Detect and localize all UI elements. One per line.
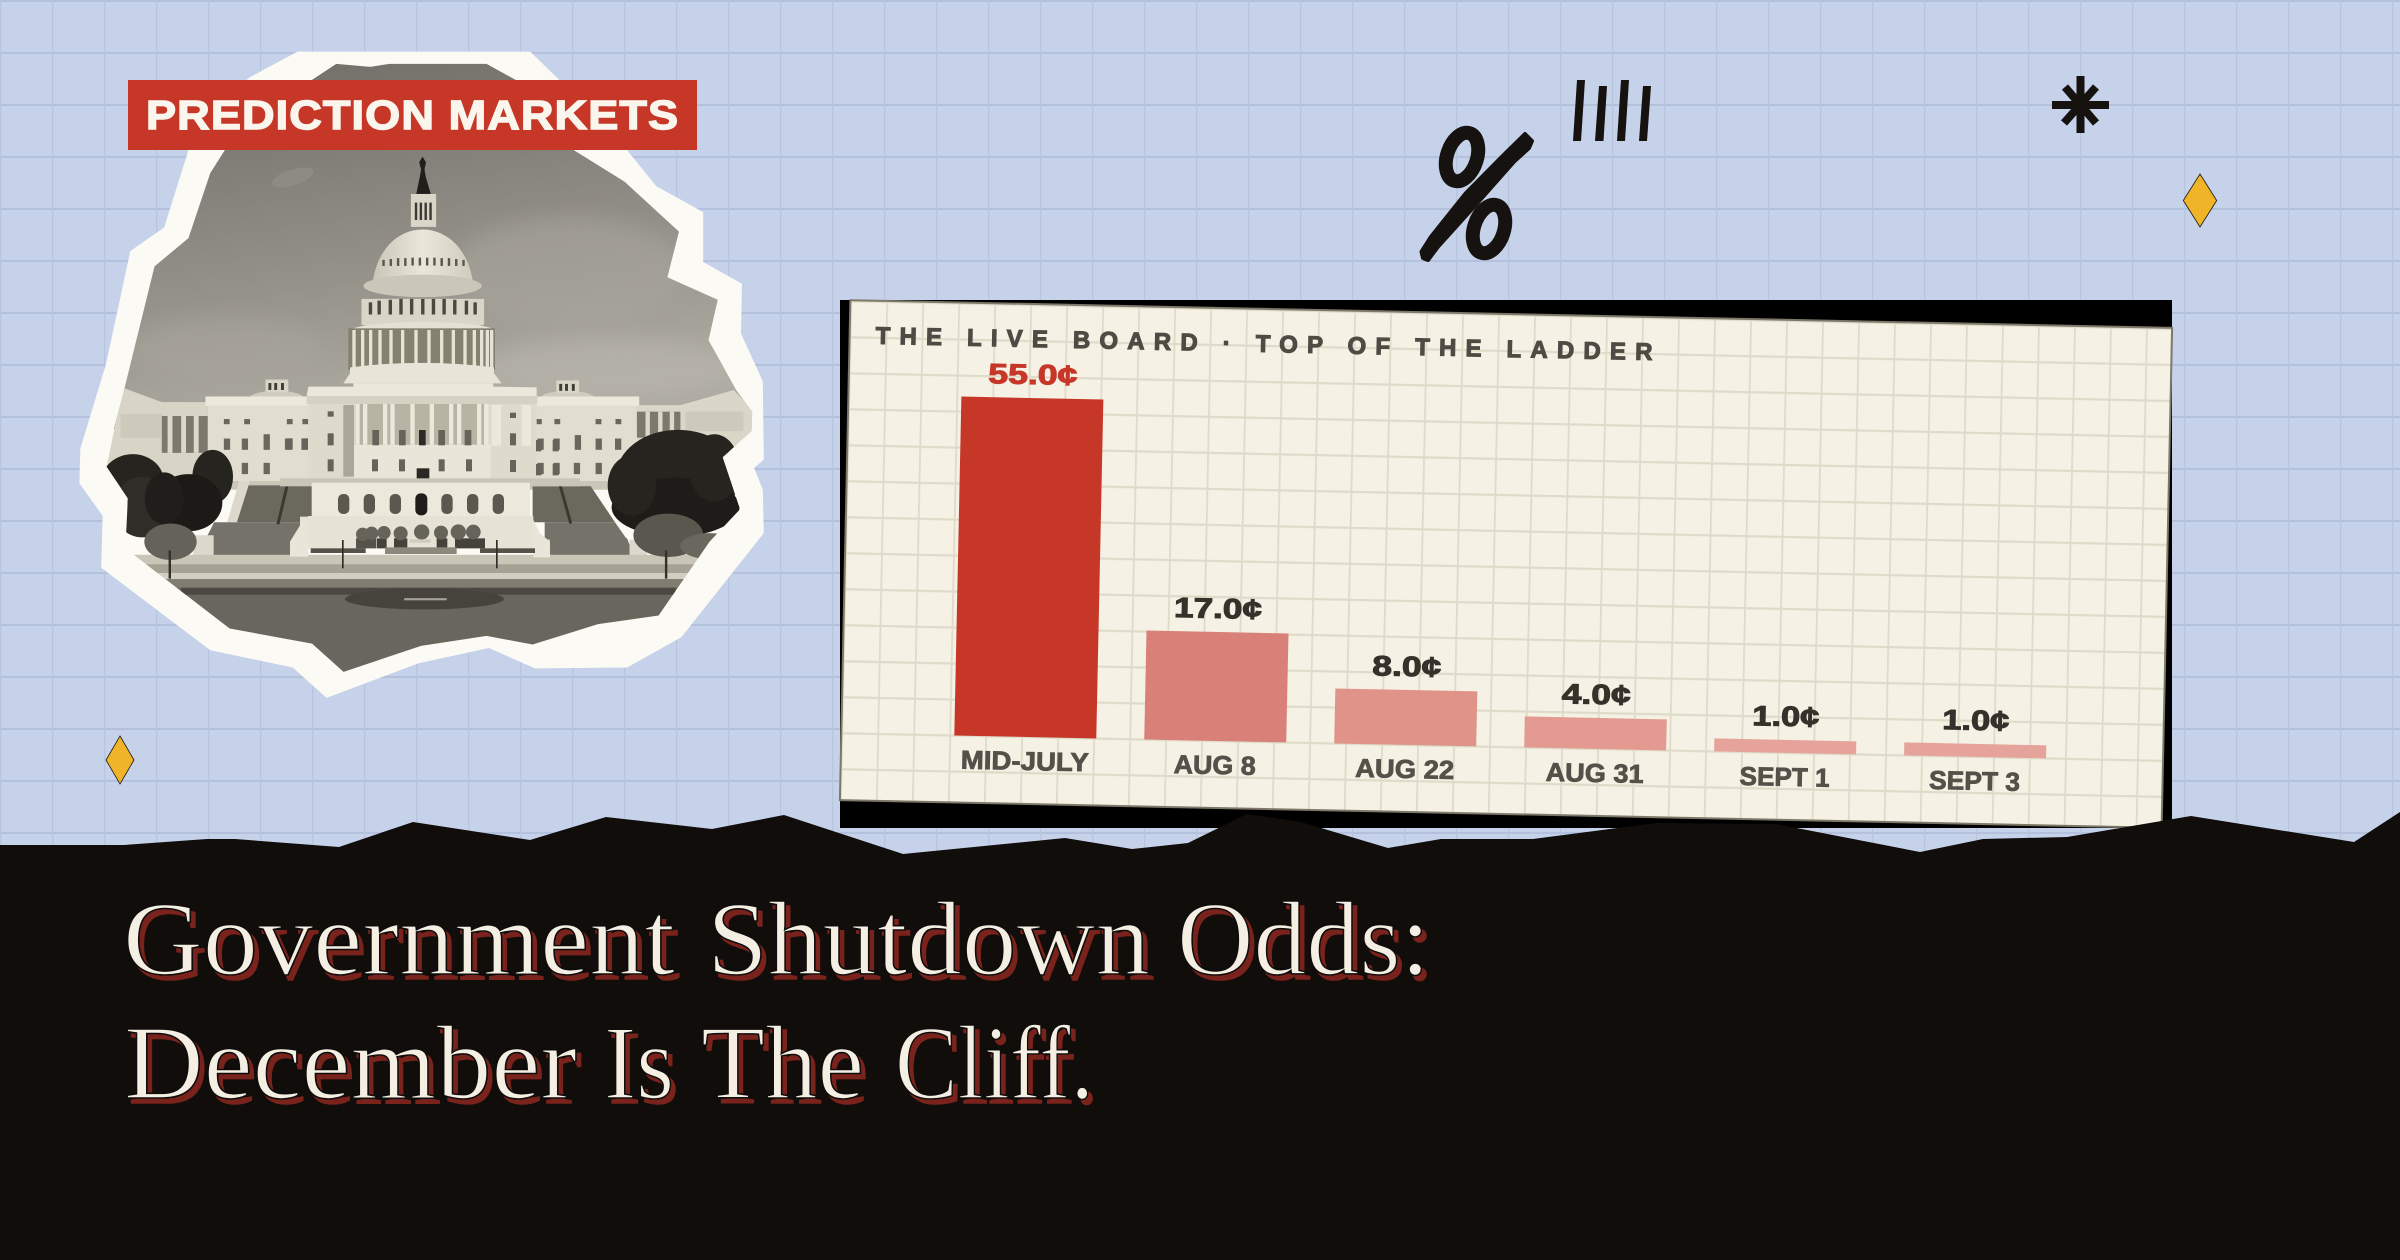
chart panel: live board xyxy=(840,300,2172,828)
bar: Aug 31 4.0 cents xyxy=(1523,677,1668,789)
bar: Mid-July 55.0 cents xyxy=(953,358,1104,777)
category label: Prediction Markets xyxy=(128,80,697,150)
bar: Mid-July 55.0 cents: MID-JULY xyxy=(960,745,1089,777)
bar: Aug 22 8.0 cents: 8.0¢ xyxy=(1372,650,1442,683)
chart title: THE LIVE BOARD · TOP OF THE LADDER xyxy=(875,323,1653,366)
bar: Sept 3 1.0 cents: SEPT 3 xyxy=(1929,765,2020,797)
category label: Prediction Markets: PREDICTION MARKETS xyxy=(146,93,679,139)
bar: Sept 3 1.0 cents: 1.0¢ xyxy=(1942,704,2010,737)
headline: Odds: xyxy=(1177,880,1430,997)
headline: The xyxy=(701,1004,864,1121)
torn dark footer xyxy=(0,812,2400,1260)
bar: Sept 1 1.0 cents: 1.0¢ xyxy=(1752,700,1820,733)
headline: Shutdown xyxy=(707,880,1150,997)
headline: December xyxy=(124,1004,577,1121)
photo cutout: US Capitol xyxy=(79,52,777,698)
icon: gold diamond right xyxy=(2183,174,2217,227)
bar: Mid-July 55.0 cents: 55.0¢ xyxy=(988,358,1078,391)
headline xyxy=(123,880,1430,1121)
icon: asterisk xyxy=(2052,76,2109,133)
bar: Sept 3 1.0 cents xyxy=(1903,703,2047,797)
bar: Aug 31 4.0 cents: 4.0¢ xyxy=(1561,678,1631,711)
bar: Aug 8 17.0 cents: AUG 8 xyxy=(1173,749,1256,781)
bar: Sept 1 1.0 cents: SEPT 1 xyxy=(1739,761,1830,793)
bar: Aug 31 4.0 cents: AUG 31 xyxy=(1545,757,1644,789)
bar: Aug 22 8.0 cents: AUG 22 xyxy=(1355,753,1454,785)
icon: tally marks xyxy=(1573,80,1651,141)
headline: Is xyxy=(604,1004,674,1121)
icon: percent scribble xyxy=(1422,129,1532,260)
icon: gold diamond left xyxy=(106,736,134,784)
bar: Aug 8 17.0 cents: 17.0¢ xyxy=(1174,592,1262,625)
bar: Sept 1 1.0 cents xyxy=(1713,699,1857,793)
bar: Aug 8 17.0 cents xyxy=(1143,591,1289,781)
headline: Cliff. xyxy=(895,1004,1094,1121)
bar: Aug 22 8.0 cents xyxy=(1333,649,1478,785)
headline: Government xyxy=(123,880,675,997)
